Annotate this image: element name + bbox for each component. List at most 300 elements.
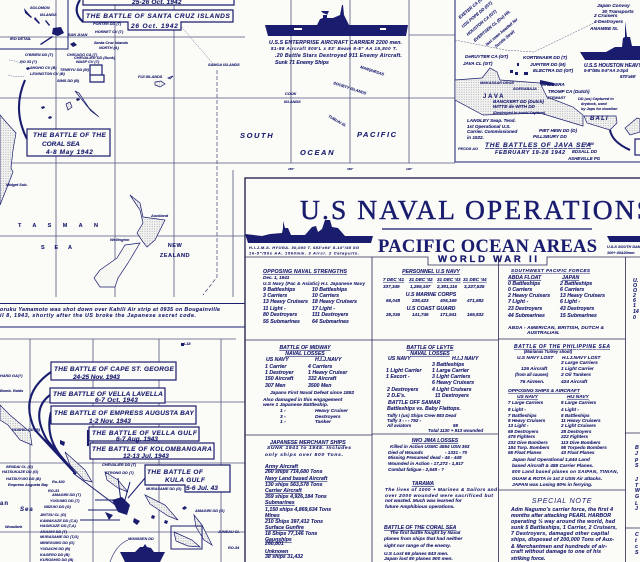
tiny ship list: AMAGIRI DD (T): [51, 493, 82, 497]
panel: special note: 7 Destroyers, damaged other capital: [511, 531, 610, 537]
text: South Dakota caption: 100+ 40&20mm: [607, 251, 635, 255]
panel: southwest Pacific forces: 0 Carriers: [508, 287, 532, 293]
map: ship losses near Santa Cruz: SAN JUAN: [68, 33, 88, 37]
panel: Battle of the Philippine Sea: based Aircraft & 455 Carrier Planes.: [512, 463, 593, 469]
text: USS Houston caption: 570'x66': [620, 74, 637, 79]
label: Battle of Kula Gulf: THE BATTLE OF: [147, 469, 204, 476]
tiny ship list: Ro-100: [52, 480, 66, 484]
map panel: Battles of Java Sea: drydock, used: [581, 102, 607, 106]
map: Tasman Sea label: [6, 183, 98, 251]
label: Battle of Vella Gulf: THE BATTLE OF VELLA GULF: [92, 430, 198, 437]
map panel: Battles of Java Sea: STEWART: [547, 96, 566, 100]
panel: Japanese merchant ships: Carrier Aircraft: [265, 488, 302, 494]
panel: Iwo Jima losses: Wounded in Action - 17,272 - 1,917: [388, 461, 464, 466]
panel: opposing naval strengths: 64 Submarines: [312, 319, 349, 325]
panel: Battle of the Philippine Sea: BATTLE OF THE PHILIPPINE SEA: [514, 344, 610, 350]
panel: Battle of Midway losses: NAVAL LOSSES: [285, 351, 325, 357]
panel: personnel US Navy: 337,349: [383, 284, 400, 289]
panel: opposing naval strengths: 17 Light -: [312, 306, 335, 312]
map: Solomon Islands inset: ISLANDS: [40, 13, 57, 17]
tiny ship list: I-18: [184, 342, 191, 346]
map: ocean labels: SOCIETY ISLANDS: [333, 81, 367, 96]
label: Battle of Empress Augusta Bay: THE BATTLE OF EMPRESS AUGUSTA BAY: [54, 410, 194, 417]
panel: Battle of Leyte losses: 3 Battleships: [432, 362, 464, 368]
panel: personnel US Navy: PERSONNEL U.S NAVY: [402, 269, 460, 275]
map: New Zealand: ZEALAND: [160, 253, 190, 259]
panel: Battle of the Philippine Sea: [507, 344, 618, 488]
panel: Japanese merchant ships: 359 ships 4,926,184 Tons: [265, 494, 327, 500]
map panel: Battles of Java Sea: ASHEVILLE PG: [567, 156, 601, 161]
panel: Battle of the Philippine Sea: 8 Light -: [508, 407, 526, 412]
map: battle of Santa Cruz label: 26 Oct. 1942: [130, 23, 178, 30]
panel: Tarawa: The lives of 1000 + Marines & Sailors and: [385, 487, 498, 493]
text: USS Enterprise caption: Sunk 71 Enemy Ships: [275, 60, 329, 66]
panel: Battle of Midway losses: Tanker: [315, 419, 332, 425]
text: South Dakota caption: [607, 245, 640, 255]
panel: opposing naval strengths: 55 Submarines: [263, 319, 300, 325]
text: USS Enterprise caption: 81-85 Aircraft 809'L x 83' Beam 8-5" AA 19,800 T.: [271, 46, 397, 51]
panel: Battle of the Coral Sea: BATTLE OF THE CORAL SEA: [384, 525, 457, 531]
panel: Battle of Midway losses: Also damaged in this engagement: [262, 397, 343, 403]
panel: Battle of Leyte losses: 4 Light Cruisers: [431, 387, 472, 393]
map: New Zealand: Wellington: [110, 238, 130, 242]
map: ship losses near Santa Cruz: O'BRIEN DD (T): [25, 53, 54, 57]
map: ship losses near Santa Cruz: PORTER DD (T): [93, 22, 122, 26]
tiny ship list: Empress Augusta Bay: [8, 483, 49, 487]
panel: fourth column fragments: 2: [632, 293, 636, 299]
panel: Tarawa: over 2000 wounded were sacrificed but: [385, 493, 493, 499]
panel: fourth column fragments: J: [635, 477, 638, 483]
panel: Battle of Leyte losses: 55: [453, 423, 459, 428]
panel: fourth column fragments: [632, 278, 640, 556]
map: New Zealand: Auckland: [150, 214, 169, 218]
text: USS Houston caption: [584, 63, 640, 79]
map panel: Battles of Java Sea: DD (us) Captured in: [578, 97, 614, 101]
panel: personnel US Navy: U.S COAST GUARD: [407, 306, 456, 312]
panel: special note: months after attacking PEARL HARBOR: [511, 513, 611, 519]
panel: Battle of the Philippine Sea: 7 Large Carriers: [508, 400, 544, 405]
panel: Japanese merchant ships: only ships over 500 Tons.: [265, 452, 343, 458]
panel: Japanese merchant ships: [264, 440, 351, 560]
panel: southwest Pacific forces: 6 Light -: [560, 299, 580, 305]
panel: fourth column fragments: J: [635, 451, 638, 457]
panel: Iwo Jima losses: Combat fatigue - 2,648 - ?: [388, 467, 444, 472]
map panel: Battles of Java Sea: ELECTRA DD (GT): [533, 68, 574, 73]
map: ocean labels: 150°: [288, 167, 295, 171]
map: Battle of the Coral Sea label: THE BATTLE OF THE: [33, 132, 106, 139]
panel: Japanese merchant ships: 210 Ships 397,412 Tons: [264, 519, 323, 525]
ship: USS Houston silhouette: [580, 21, 640, 60]
panel: personnel US Navy: U.S MARINE CORPS: [406, 292, 457, 298]
panel: Iwo Jima losses: Killed in Action USMC 4554 USN 363: [390, 444, 470, 449]
map panel: Battles of Java Sea: SOERABAJA: [513, 87, 537, 91]
panel: Japanese merchant ships: Navy Land based Aircraft: [265, 476, 328, 482]
label: Battle of Vella Lavella: 6-7 Oct. 1943: [95, 397, 138, 404]
panel: Battle of Leyte losses: US NAVY: [388, 356, 411, 362]
panel: Tarawa: [385, 481, 498, 510]
panel: Battle of Midway losses: 1 Destroyer: [265, 370, 295, 376]
panel: opposing naval strengths: 10 Carriers: [312, 293, 339, 299]
map: ocean labels: [240, 65, 413, 171]
text strip: Yamamoto note: il 8, 1943, shortly after the US broke the Japanese secret code.: [0, 313, 197, 319]
map: battle arcs: [29, 372, 88, 474]
map: ocean labels: 150°: [347, 167, 354, 171]
panel: Battle of Midway losses: 150 Aircraft: [265, 376, 294, 382]
map: ship losses near Santa Cruz: Santa Cruz Islands: [94, 41, 128, 45]
panel: personnel US Navy: 7 DEC '41: [383, 277, 404, 282]
panel: southwest Pacific forces: 15 Submarines: [560, 313, 597, 319]
text strip: Yamamoto note: [0, 304, 245, 327]
panel: Japanese merchant ships: Mines: [265, 513, 280, 519]
tiny ship list: Woodlark: [5, 525, 23, 529]
tiny ship list: MINEGUMO DD (G): [40, 541, 75, 545]
panel: opposing naval strengths: 18 Heavy Cruisers: [312, 299, 357, 305]
panel: southwest Pacific forces: 0 Battleships: [508, 281, 540, 287]
tiny ship list: HATSUKAZE DD (G): [2, 470, 39, 474]
panel: Battle of Leyte losses: 2 Destroyers: [386, 387, 419, 393]
panel: Battle of the Philippine Sea: 500 Land based planes on SAIPAN, TINIAN,: [512, 469, 618, 474]
map panel: Battles of Java Sea: BANCKERT DD (Dutch): [493, 99, 544, 104]
panel: Battle of the Philippine Sea: 8 Heavy Cruisers: [508, 418, 546, 423]
panel: Iwo Jima losses: IWO JIMA LOSSES: [412, 438, 459, 444]
panel: Japanese merchant ships: 1,150 ships 4,869,634 Tons: [265, 507, 331, 513]
panel: personnel US Navy: [383, 269, 487, 317]
map: New Zealand: [94, 195, 190, 287]
panel: Battle of Midway losses: 1 -: [280, 419, 286, 425]
map: ocean labels: PACIFIC: [357, 130, 398, 139]
map: ship losses near Santa Cruz: CHEVALIER DD (Sunk): [74, 56, 116, 60]
label: Battle of Cape St. George: [51, 362, 176, 381]
panel: opposing naval strengths: 9 Battleships: [263, 287, 295, 293]
panel: Battle of Midway losses: H.I.J.NAVY: [315, 357, 342, 363]
label: Battle of Kula Gulf: KULA GULF: [165, 477, 206, 484]
panel: fourth column fragments: O: [633, 283, 637, 289]
tiny ship list: KUROSHIO DD (B): [40, 558, 74, 562]
panel: southwest Pacific forces: ABDA - AMERICAN, BRITISH, DUTCH &: [507, 325, 605, 331]
panel: Battle of the Philippine Sea: 43 Float Planes: [560, 450, 595, 455]
map: Battle of the Coral Sea label: CORAL SEA: [42, 141, 80, 148]
map panel: Battles of Java Sea: Carrier. Commissioned: [467, 129, 517, 134]
panel: opposing naval strengths: 80 Destroyers: [263, 312, 297, 318]
panel: Japanese merchant ships: 260 ships 714,680 Tons: [264, 469, 323, 475]
map panel: Battles of Java Sea: in 1922.: [467, 135, 484, 140]
panel: fourth column fragments: W: [635, 488, 640, 494]
map panel: Battles of Java Sea: JAVA CL (GT): [463, 61, 493, 66]
panel: opposing naval strengths: 3 Carriers: [263, 293, 287, 299]
label: Battle of Kolombangara: [90, 443, 214, 460]
map panel: Battles of Java Sea: JAVA: [483, 94, 505, 100]
panel: Tarawa: TARAWA: [412, 481, 434, 487]
text: Hyuga caption: H.I.J.M.S. HYUGA. 30,000 T. 683'x94' 8-14"/45 SG: [249, 245, 359, 250]
panel: Battle of the Coral Sea: The first battle fought by Naval: [390, 530, 461, 536]
map panel: Battles of Java Sea: BALI: [590, 116, 609, 122]
panel: fourth column fragments: S: [635, 463, 639, 469]
tiny ship list: KAWAKAZE DD (T,A): [40, 519, 78, 523]
text: USS Enterprise caption: U.S.S ENTERPRISE AIRCRAFT CARRIER 2200 men.: [269, 40, 402, 46]
panel: Iwo Jima losses: - 1331 - 70: [445, 450, 468, 455]
tiny ship list: SENDAI CL (G): [6, 465, 34, 469]
panel: fourth column fragments: U.: [633, 278, 638, 284]
text: USS Enterprise caption: [269, 40, 402, 66]
rotated ship labels: HOUSTON CA (GT): [465, 8, 498, 37]
panel: Battle of the Philippine Sea: 184 Torp. Bombers: [508, 445, 550, 450]
panel: Battle of the Philippine Sea: OPPOSING SHIPS & AIRCRAFT: [508, 388, 581, 394]
map panel: Battles of Java Sea: LANGLEY Seap. Tend.: [467, 118, 516, 123]
text: Java convoy note: [589, 3, 634, 32]
panel: Battle of Leyte losses: 3 Light Carriers: [432, 374, 470, 380]
panel: fourth column fragments: 6: [633, 298, 636, 304]
map: ocean labels: COOK: [285, 92, 297, 96]
map panel: Battles of Java Sea: 2 000: [584, 142, 594, 146]
panel: Battle of the Philippine Sea: HIJ NAVY: [567, 394, 590, 400]
rotated ship labels: [457, 0, 519, 49]
panel: fourth column fragments: 14: [633, 309, 639, 315]
panel: Japanese merchant ships: Unknown: [265, 549, 288, 555]
ship: USS Enterprise silhouette: [265, 5, 408, 36]
map panel: Battles of Java Sea: 1st Operational U.S.: [467, 124, 511, 129]
panel: special note: craft without damage to one of his: [511, 549, 601, 555]
panel: southwest Pacific forces: 6 Carriers: [560, 287, 584, 293]
label: Battle of Vella Lavella: [50, 388, 165, 404]
label: Battle of Vella Gulf: 6-7 Aug. 1943: [116, 436, 158, 443]
panel: southwest Pacific forces: AUSTRALIAN.: [526, 330, 560, 336]
panel: Battle of the Philippine Sea: 76 Airmen.: [520, 379, 544, 385]
map panel: Battles of Java Sea: TROMP CA (Dutch): [548, 89, 590, 94]
subtitle: World War II: WORLD WAR II: [438, 254, 537, 265]
map: ship losses near Santa Cruz: WASP CV (T): [76, 60, 100, 64]
tiny ship list: JUNEAU CL: [218, 530, 240, 534]
panel: fourth column fragments: t: [635, 538, 637, 544]
panel: opposing naval strengths: 111 Destroyers: [312, 312, 349, 318]
panel: Battle of Midway losses: 307 Men: [265, 383, 285, 389]
panel: Battle of Leyte losses: BATTLE OFF SAMAR: [388, 400, 441, 406]
panel: Battle of Midway losses: Destroyers: [315, 414, 341, 420]
label: Battle of Cape St. George: 24-25 Nov. 1943: [72, 374, 120, 381]
panel: Battle of the Philippine Sea: 222 Fighters: [560, 434, 589, 439]
text: Java convoy note: 4 Destroyers: [593, 19, 623, 25]
panel: fourth column fragments: T: [635, 483, 639, 489]
panel: Battle of Leyte losses: NAVAL LOSSES: [410, 351, 450, 357]
panel: special note: [510, 496, 617, 562]
panel: Battle of Leyte losses: All aviators: [386, 423, 412, 428]
panel: opposing naval strengths: 11 Light -: [263, 306, 286, 312]
panel: Battle of the Philippine Sea: US NAVY: [517, 394, 539, 400]
tiny ship list: HATSUYUKI DD (B): [6, 477, 41, 481]
panel: Iwo Jima losses: Missing Presumed dead - 46 - 448: [388, 455, 462, 460]
panel: personnel US Navy: 66,048: [386, 298, 400, 303]
text: Hyuga caption: 16-5"/50s AA. 1560mm. 3 Aircr. 2 Catapults.: [249, 250, 359, 256]
panel: Japanese merchant ships: Army Aircraft: [264, 464, 298, 470]
tiny ship list: JINTSU CL (G): [40, 513, 67, 517]
ship: HIJMS Hyuga silhouette: [245, 220, 373, 243]
panel: opposing naval strengths: OPPOSING NAVAL STRENGTHS: [263, 269, 348, 275]
map: Solomon Islands inset: SOLOMON: [30, 6, 50, 10]
panel: Battle of the Philippine Sea: 69 Destroyers: [508, 429, 539, 434]
panel: Battle of Midway losses: 3500 Men: [308, 383, 331, 389]
map panel: Battles of Java Sea: [455, 0, 640, 162]
label: Battle of Vella Gulf: [89, 427, 199, 443]
panel: opposing naval strengths: Dec. 1, 1941: [263, 275, 290, 280]
panel: Battle of Midway losses: Heavy Cruiser: [315, 408, 349, 414]
map: ship losses near Santa Cruz: LEXINGTON CV (B): [30, 72, 65, 76]
text: USS Houston caption: 9-8"/55s 8-5"AA 2-Spd: [584, 68, 629, 73]
panel: personnel US Navy: 405,169: [439, 298, 457, 303]
panel: Battle of the Philippine Sea: Japan had Operational 1,644 Land: [512, 457, 591, 463]
panel: fourth column fragments: C: [635, 532, 639, 538]
map: Tasman Sea label: SEA: [41, 245, 72, 251]
panel: Battle of the Coral Sea: Japan lost 80 planes 900 men.: [384, 556, 453, 562]
panel: Battle of the Coral Sea: sight nor range of the enemy.: [384, 543, 451, 549]
map: ship losses near Santa Cruz: NORTH (A): [99, 46, 119, 50]
map: Tasman Sea label: TASMAN: [18, 223, 98, 229]
panel: Battle of the Philippine Sea: 95 Torpedo Bombers: [561, 445, 607, 450]
panel: fourth column fragments: O: [633, 288, 637, 294]
panel: personnel US Navy: 169,832: [467, 312, 484, 317]
panel: Battle of the Philippine Sea: 65 Float Planes: [508, 450, 542, 455]
label: Battle of Empress Augusta Bay: 1-2 Nov. 1943: [89, 418, 131, 425]
panel: Battle of Midway losses: 4 Carriers: [307, 364, 332, 370]
panel: southwest Pacific forces: 2 Heavy Cruisers: [507, 293, 550, 299]
panel: fourth column fragments: J: [635, 506, 638, 512]
panel: Battle of Midway losses: [262, 345, 354, 425]
text: Java convoy note: 30 Transports: [602, 9, 634, 15]
panel: personnel US Navy: 2,381,116: [436, 284, 458, 289]
map panel: Battles of Java Sea: EDSALL DD: [572, 149, 598, 154]
map: Australia coast: [0, 115, 16, 205]
tiny ship list: HARD GA(?): [0, 374, 23, 378]
tiny ship list: ARASHI DD (T): [39, 530, 68, 534]
panel: special note: sunk 5 Battleships, 1 Carrier, 2 Cruisers,: [511, 525, 617, 531]
panel: Battle of the Philippine Sea: 2 Large Carriers: [560, 360, 598, 366]
map panel: Battles of Java Sea: PILLSBURY DD: [533, 134, 567, 139]
panel: Battle of Midway losses: 1 Carrier: [265, 364, 287, 370]
panel: southwest Pacific forces: 7 Light -: [508, 299, 528, 305]
panel: special note: operating ½ way around the world, had: [511, 518, 616, 525]
panel: Battle of Midway losses: BATTLE OF MIDWAY: [279, 345, 331, 351]
panel: Japanese merchant ships: Surface Gunfire: [265, 525, 304, 531]
map panel: Battles of Java Sea: FEBRUARY 19-28 1942: [495, 150, 565, 156]
panel: Battle of Leyte losses: Taffy I (us) Ships Crew 583 Dead: [387, 413, 457, 418]
panel: Tarawa: future Amphibious operations.: [385, 504, 455, 510]
panel: Japanese merchant ships: 18 Ships 77,146 Tons: [265, 531, 317, 537]
panel: Battle of the Coral Sea: [383, 525, 463, 562]
label: Battle of Kolombangara: THE BATTLE OF KOLOMBANGARA: [92, 446, 212, 453]
tiny ship list: [0, 342, 240, 562]
panel: southwest Pacific forces: 13 Heavy Cruisers: [560, 293, 605, 299]
heading: Java Sea: THE BATTLES OF JAVA SEA: [485, 142, 591, 149]
panel: personnel US Navy: 1,259,167: [410, 284, 431, 289]
map: ship losses near Santa Cruz: SIMS DD (B): [57, 79, 80, 83]
map: ocean labels: MARQUESAS: [360, 65, 385, 77]
label: Battle of Empress Augusta Bay: [51, 406, 196, 425]
tiny ship list: HOSHIO DD (B): [12, 428, 41, 432]
map: Solomon Islands inset: [0, 0, 68, 49]
panel: Battle of Midway losses: were 1 Japanese Battleship.: [263, 402, 328, 408]
panel: personnel US Navy: 31 DEC '44: [463, 277, 487, 282]
panel: Battle of the Philippine Sea: 5 Battleships: [561, 413, 590, 418]
map: ship losses near Santa Cruz: SHOHO CV (B): [30, 66, 57, 70]
rotated ship labels: USS POPE DD (GT): [460, 0, 494, 29]
panel: Battle of Leyte losses: 2 D.E's.: [386, 393, 406, 399]
tiny ship list: HAGIKAZE DD (T,A): [40, 524, 77, 528]
panel: Battle of Leyte losses: 6 Heavy Cruisers: [432, 380, 474, 386]
panel: Battle of Leyte losses: Battleships vs. Baby Flattops.: [387, 406, 461, 412]
panel: personnel US Navy: 31 DEC '43: [437, 277, 461, 282]
tiny ship list: YUGUMO DD (T): [50, 499, 80, 503]
panel: southwest Pacific forces: [507, 268, 605, 336]
panel: Battle of the Philippine Sea: 113 Dive Bombers: [561, 440, 601, 445]
tiny ship list: Sea: [20, 507, 34, 513]
map panel: Battles of Java Sea: MADOERA: [541, 82, 565, 87]
tiny ship list: RO-34: [228, 546, 240, 550]
panel: Japanese merchant ships: Gaunships: [265, 537, 292, 543]
panel: southwest Pacific forces: 43 Destroyers: [559, 306, 594, 312]
panel: Battle of Leyte losses: [386, 345, 483, 433]
panel: Battle of Leyte losses: 1 Escort -: [386, 374, 410, 380]
panel: Battle of Leyte losses: 1 Large Carrier: [432, 368, 470, 374]
map: ocean labels: OCEAN: [300, 148, 335, 157]
panel: opposing naval strengths: 13 Heavy Cruisers: [263, 299, 308, 305]
label: Battle of Kula Gulf: 5-6 Jul. 43: [186, 485, 218, 492]
text: Java convoy note: ANAMBE IS.: [589, 26, 618, 32]
panel: Iwo Jima losses: [388, 438, 470, 472]
panel: Battle of the Philippine Sea: 13 Light -: [508, 423, 529, 428]
panel: Battle of the Philippine Sea: 2 Oil Tankers: [560, 372, 591, 378]
map: Battle of the Coral Sea label: [19, 80, 110, 156]
map: New Zealand: NEW: [168, 243, 182, 249]
panel: southwest Pacific forces: JAPAN: [562, 275, 579, 281]
panel: Japanese merchant ships: 130 ships 563,578 Tons: [265, 482, 323, 488]
panel: special note: striking force.: [511, 556, 545, 562]
map panel: Battles of Java Sea: PECOS AO: [458, 147, 478, 151]
panel: Battle of Leyte losses: Taffy 3 - - - 792 -: [387, 418, 422, 423]
panel: special note: SPECIAL NOTE: [532, 496, 592, 505]
panel: Tarawa: not wasted. Much was learned for: [385, 498, 463, 504]
panel: personnel US Navy: 171,941: [440, 312, 457, 317]
map: ocean labels: TUBUAI IS.: [328, 114, 347, 128]
panel: fourth column fragments: L: [635, 501, 638, 507]
map panel: Battles of Java Sea: KORTENAER DD (T): [523, 55, 568, 60]
text: Hyuga caption: [249, 245, 359, 256]
panel: southwest Pacific forces: ABDA FLOAT: [507, 275, 542, 281]
panel: special note: & Merchantmen and hundreds of air-: [511, 544, 607, 550]
tiny ship list: Bomb. Raids: [0, 389, 23, 393]
label: Battle of Kolombangara: 12-13 Jul. 1943: [123, 453, 169, 460]
title panel: [245, 178, 640, 562]
panel: fourth column fragments: c: [635, 544, 638, 550]
panel: Battle of the Coral Sea: planes from ships that had neither: [383, 536, 463, 542]
map: Solomon Islands inset: IRO DETAIL: [10, 37, 32, 41]
text strip: Yamamoto note: oruku Yamamoto was shot down over Kahili Air strip at 0935 on Bougainville: [0, 307, 220, 313]
panel: opposing naval strengths: 10 Battleships: [312, 287, 347, 293]
panel: Battle of the Philippine Sea: JAPAN was Losing 80% in ferrying.: [512, 482, 592, 488]
panel: personnel US Navy: 238,423: [411, 298, 429, 303]
tiny ship list: RO-31: [48, 489, 59, 493]
panel: personnel US Navy: 141,746: [412, 312, 429, 317]
panel: southwest Pacific forces: 2 Battleships: [559, 281, 592, 287]
map: ocean labels: 140°: [406, 167, 413, 171]
map: ship losses near Santa Cruz: [8, 22, 240, 119]
panel: Battle of Midway losses: 332 Aircraft: [308, 376, 337, 382]
panel: Battle of Leyte losses: 11 Destroyers: [435, 393, 469, 399]
tiny ship list: YUDACHI DD (B): [40, 547, 71, 551]
tiny ship list: MURASAME DD (T,G): [40, 535, 79, 539]
panel: special note: Adm Nagumo's carrier force, the first 4: [510, 507, 613, 513]
panel: southwest Pacific forces: 23 Destroyers: [507, 306, 542, 312]
panel: Battle of the Philippine Sea: U.S NAVY LOST: [517, 355, 554, 361]
tiny ship list: AMAGIRI DD (G): [194, 509, 225, 513]
label: Battle of Cape St. George: THE BATTLE OF CAPE ST. GEORGE: [54, 366, 174, 373]
